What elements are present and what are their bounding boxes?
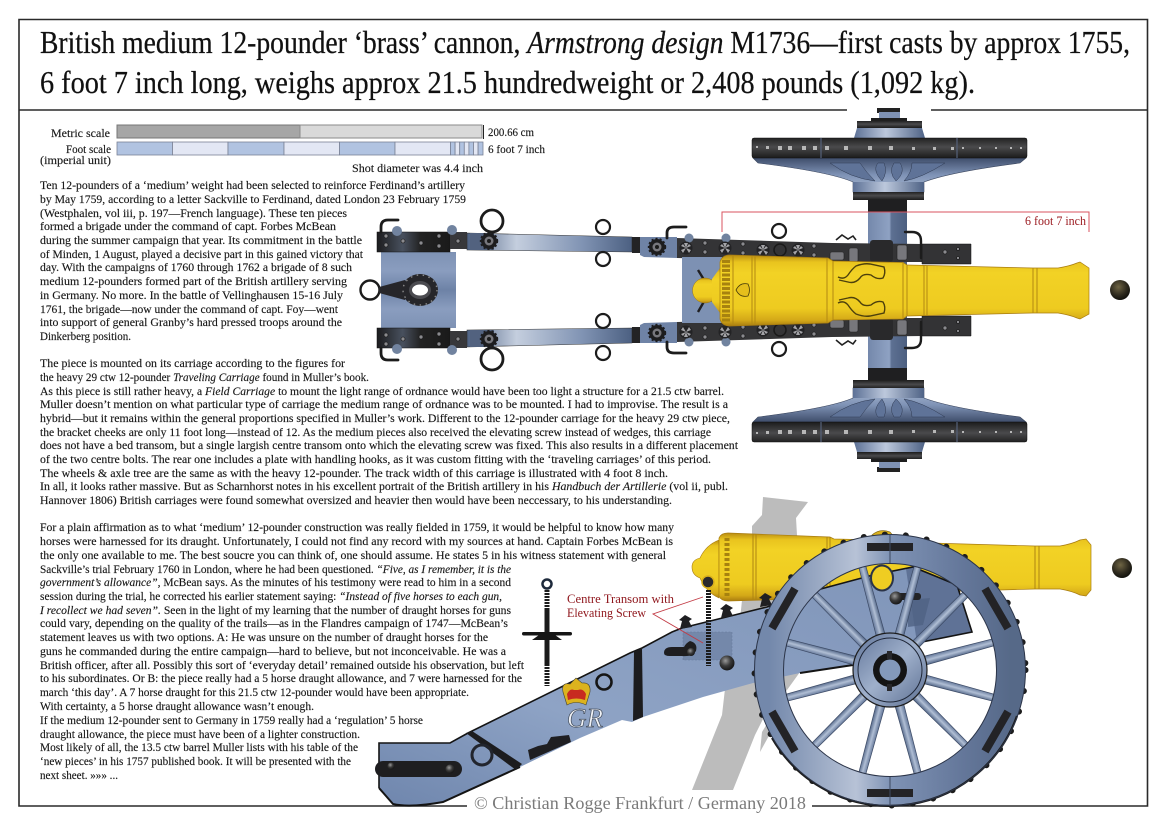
- iron hook: [664, 641, 696, 656]
- text block: paragraph 2: does not have a bed transom, but a single largish centre transom onto which the elevating screw was fixed. This also results in a different placement: [40, 438, 739, 452]
- royal arms ornament: [838, 264, 885, 316]
- transom ghost: [683, 632, 732, 660]
- text block: paragraph 2: [40, 356, 739, 507]
- text block: paragraph 1: in Germany. No more. In the battle of Vellinghausen 15-16 July: [40, 288, 343, 302]
- trail strap: [466, 731, 522, 770]
- royal cypher: GR: [567, 703, 603, 733]
- title: 6 foot 7 inch long, weighs approx 21.5 hundredweight or 2,408 pounds (1,092 kg).: [40, 64, 975, 100]
- text block: paragraph 2: the heavy 29 ctw 12-pounder Traveling Carriage found in Muller’s book.: [40, 370, 369, 384]
- foot scale: [117, 142, 483, 155]
- wheel side view: [754, 534, 1026, 806]
- text block: paragraph 1: formed a brigade under the command of capt. Forbes McBean: [40, 219, 336, 233]
- text block: paragraph 3: the only one available to me. The best soucre you can think of, one should assume. He states 5 in his witness statement with general: [40, 548, 667, 562]
- callout: centre transom with elevating screw: Centre Transom with: [567, 592, 675, 606]
- text block: paragraph 1: Ten 12-pounders of a ‘medium’ weight had been selected to reinforce Ferdinand’s artillery: [40, 178, 465, 192]
- text block: paragraph 1: into support of general Granby’s hard pressed troops around the: [40, 315, 342, 329]
- felloe: [754, 534, 1026, 806]
- text block: paragraph 2: the bracket cheeks are only 11 foot long—instead of 12. As the medium pieces also received the elevating screw instead of wedges, this carriage: [40, 425, 711, 439]
- text block: paragraph 3: could vary, depending on the quality of the trails—as in the Flandres campaign of 1747—McBean’s: [40, 616, 508, 630]
- text block: paragraph 3: march ‘this day’. A 7 horse draught for this 21.5 ctw 12-pounder would have been appropriate.: [40, 685, 469, 699]
- scale bars: (imperial unit): [40, 153, 111, 167]
- crown: [563, 678, 590, 705]
- text block: paragraph 1: during the summer campaign that year. Its commitment in the battle: [40, 233, 362, 247]
- side view of cannon: [375, 531, 1132, 806]
- text block: paragraph 1: day. With the campaigns of 1760 through 1762 a brigade of 8 such: [40, 260, 352, 274]
- handle plate: [528, 735, 571, 760]
- silhouette of soldier: [692, 497, 808, 790]
- text block: paragraph 2: As this piece is still rather heavy, a Field Carriage to mount the light range of ordnance would have been too light a structure for a 21.5 ctw barrel.: [40, 384, 724, 398]
- trunnion: [871, 566, 893, 590]
- rear part of bracket: [906, 567, 972, 643]
- text block: paragraph 3: next sheet. »»» ...: [40, 768, 118, 782]
- text block: paragraph 1: [40, 178, 466, 343]
- length dimension: [722, 212, 1089, 232]
- scale bars: [40, 125, 545, 175]
- title: British medium 12-pounder ‘brass’ cannon, Armstrong design M1736—first casts by approx 1755,: [40, 24, 1130, 60]
- scale bars: Foot scale: [66, 142, 111, 156]
- metric scale: Metric scale: [51, 126, 110, 140]
- text block: paragraph 2: The wheels & axle tree are the same as with the heavy 12-pounder. The track width of this carriage is illustrated with 4 foot 8 inch.: [40, 466, 668, 480]
- title: [40, 24, 1130, 100]
- axle tree: [868, 200, 907, 380]
- shot top view: [1110, 280, 1130, 300]
- text block: paragraph 3: I recollect we had seven”. Seen in the light of my learning that the number of draught horses for guns: [39, 603, 511, 617]
- text block: paragraph 3: session during the trial, he corrected his earlier statement saying: “Instead of five horses to each gun,: [40, 589, 502, 603]
- callout: centre transom with elevating screw: Elevating Screw: [567, 606, 646, 620]
- text block: paragraph 1: medium 12-pounders formed part of the British artillery serving: [40, 274, 347, 288]
- barrel side view: [692, 531, 1091, 601]
- cheek strap: [633, 648, 643, 721]
- metric scale: [51, 125, 535, 140]
- text block: paragraph 3: draught allowance, the piece must have been of a lighter construction.: [40, 727, 360, 741]
- hub: [853, 633, 927, 707]
- scale bars: 6 foot 7 inch: [488, 142, 545, 156]
- text block: paragraph 3: With certainty, a 5 horse draught allowance wasn’t enough.: [40, 699, 314, 713]
- top view of cannon and carriage: [360, 108, 1130, 472]
- elevating screw in place: [708, 590, 710, 666]
- top studs: [679, 593, 772, 629]
- callout: centre transom with elevating screw: [567, 592, 703, 643]
- text block: paragraph 1: Dinkerberg position.: [40, 329, 131, 343]
- text block: paragraph 3: British officer, after all. Possibly this sort of ‘everyday detail’ remained outside his observation, but left: [40, 658, 525, 672]
- lower rail of carriage: [377, 290, 971, 370]
- text block: paragraph 3: ‘new pieces’ in his 1757 published book. It will be presented with the: [40, 754, 351, 768]
- rear ring and lunette: [360, 274, 438, 306]
- length dimension: 6 foot 7 inch: [1025, 214, 1087, 228]
- spokes: [781, 561, 999, 779]
- carriage cheek: [375, 566, 972, 806]
- text block: paragraph 3: government’s allowance”, McBean says. As the minutes of his testimony were read to him in a second: [40, 575, 511, 589]
- iron plates: [769, 534, 1011, 806]
- text block: paragraph 3: If the medium 12-pounder sent to Germany in 1759 really had a ‘regulation’ 5 horse: [40, 713, 423, 727]
- shot side view: [1112, 558, 1132, 578]
- text block: paragraph 3: Most likely of all, the 13.5 ctw barrel Muller lists with his table of the: [40, 740, 358, 754]
- text block: paragraph 2: of the two centre bolts. The rear one includes a plate with handling hooks, as it was custom fitting with the ‘traveling carriages’ of this period.: [40, 452, 711, 466]
- text block: paragraph 2: The piece is mounted on its carriage according to the figures for: [40, 356, 345, 370]
- text block: paragraph 2: Hannover 1806) British carriages were found somewhat oversized and heavier then would have been neccessary, to his understanding.: [40, 493, 672, 507]
- text block: paragraph 3: horses were harnessed for its draught. Unfortunately, I could not find any record with my sources at hand. Captain Forbes McBean is: [40, 534, 673, 548]
- text block: paragraph 3: Sackville’s trial February 1760 in London, where he had been questioned. “Five, as I remember, it is the: [40, 562, 512, 576]
- footer credit: © Christian Rogge Frankfurt / Germany 2018: [474, 793, 806, 813]
- bottom wheel: [752, 368, 1027, 472]
- text block: paragraph 3: [39, 520, 674, 782]
- bracket bolts: [895, 593, 921, 600]
- text block: paragraph 3: For a plain affirmation as to what ‘medium’ 12-pounder construction was really fielded in 1759, it would be helpful to know how many: [40, 520, 674, 534]
- text block: paragraph 3: statement leaves us with two options. A: He was unsure on the number of draught horses for the: [40, 630, 488, 644]
- text block: paragraph 3: to his subordinates. Or B: the piece really had a 5 horse draught allowance, and 7 were harnessed for the: [40, 671, 522, 685]
- text block: paragraph 1: (Westphalen, vol iii, p. 197—French language). These ten pieces: [40, 206, 347, 220]
- barrel top view: [692, 255, 1089, 326]
- text block: paragraph 3: guns he commanded during the entire campaign—hard to believe, but not inconceivable. He was a: [40, 644, 507, 658]
- text block: paragraph 1: by May 1759, according to a letter Sackville to Ferdinand, dated London 23 February 1759: [40, 192, 466, 206]
- text block: paragraph 1: 1761, the brigade—now under the command of capt. Foy—went: [40, 302, 339, 316]
- rear strap: [375, 761, 462, 777]
- upper rail of carriage: [377, 210, 971, 290]
- text block: paragraph 2: hybrid—but it remains within the general proportions specified in Muller’s work. Different to the 12-pounder carriage for the heavy 29 ctw piece,: [40, 411, 730, 425]
- text block: paragraph 2: In all, it looks rather massive. But as Scharnhorst notes in his excellent portrait of the British artillery in his Handbuch der Artillerie (vol ii, publ.: [40, 479, 728, 493]
- text block: paragraph 2: Muller doesn’t mention on what particular type of carriage the medium range of ordnance was to be mounted. I had to improvise. The result is a: [40, 397, 729, 411]
- trail rings: [472, 745, 492, 765]
- top wheel: [752, 108, 1027, 212]
- loose elevating screw: [522, 580, 572, 686]
- metric scale: 200.66 cm: [488, 125, 535, 139]
- rear plate at breech: [682, 257, 722, 323]
- elevating handle at breech: [698, 270, 722, 312]
- scale bars: Shot diameter was 4.4 inch: [352, 161, 483, 175]
- text block: paragraph 1: of Minden, 1 August, played a decisive part in this gained victory that: [40, 247, 364, 261]
